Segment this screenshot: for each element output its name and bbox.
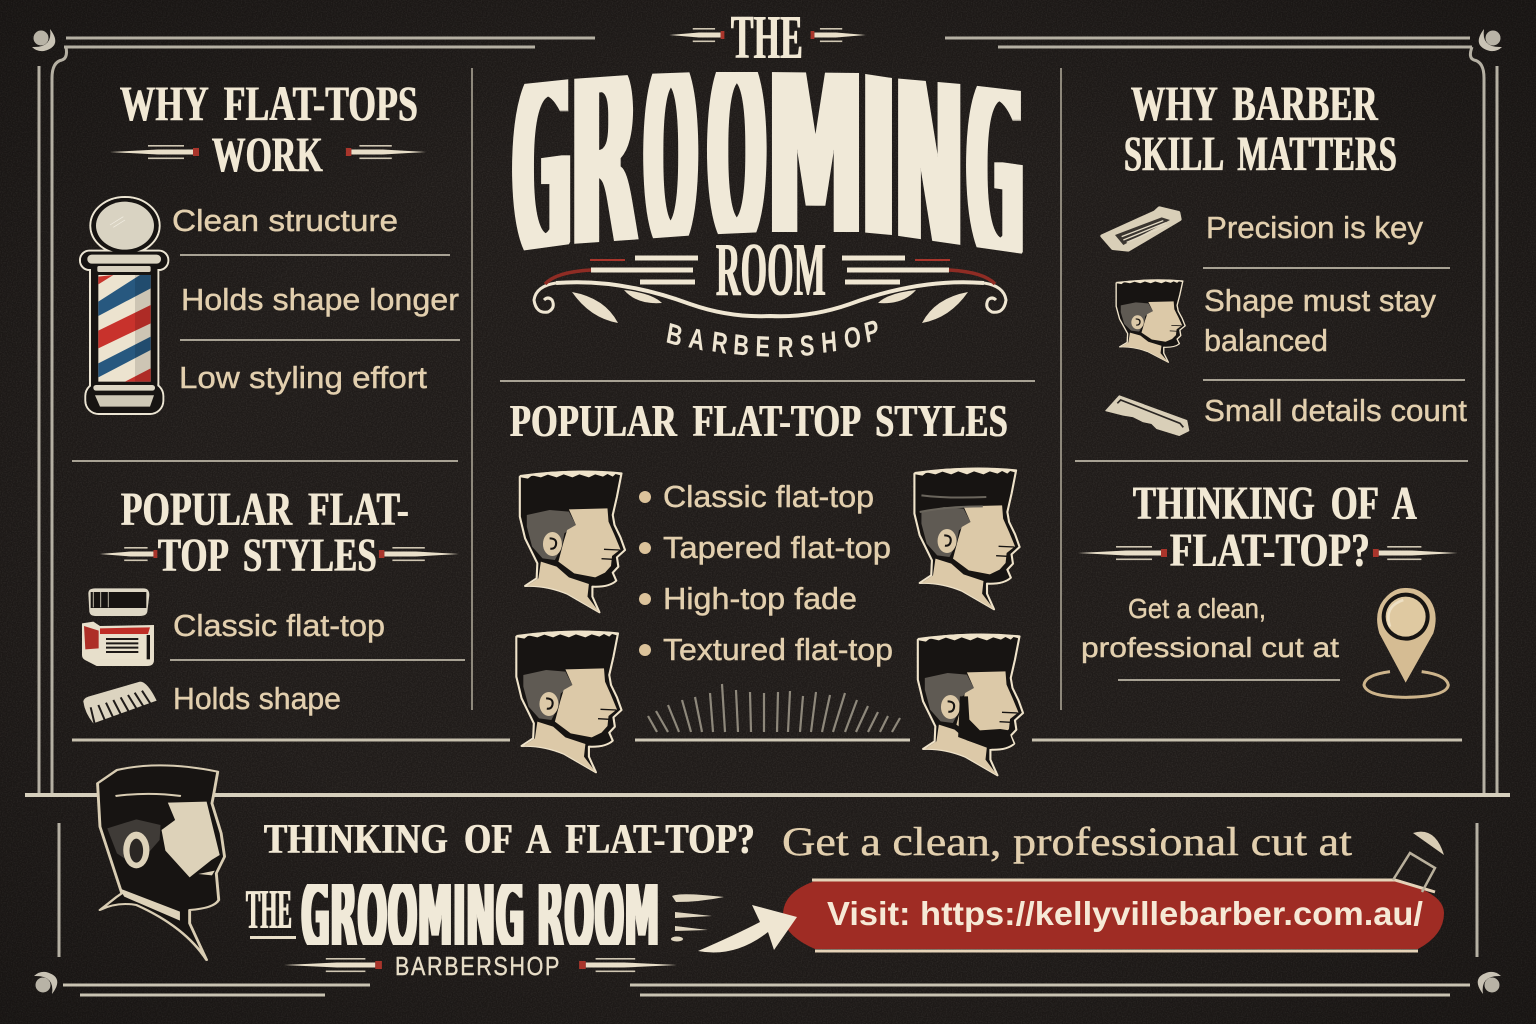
list: reasons: Low styling effort — [179, 360, 427, 395]
heading: THINKING OF A — [1133, 477, 1417, 530]
text block — [1081, 593, 1340, 680]
title word: THE: THE — [731, 4, 803, 72]
title word: GROOMING: N — [894, 8, 964, 329]
heading — [100, 483, 459, 582]
panel: thinking of a flat-top — [1078, 477, 1458, 697]
title ornaments beside THE — [669, 28, 866, 42]
list: reasons — [1203, 210, 1467, 428]
icon: location pin — [1364, 588, 1448, 697]
heading: WORK — [212, 126, 323, 182]
list: reasons: Small details count — [1204, 393, 1467, 428]
title word: GROOMING: R — [570, 3, 639, 323]
title word: GROOMING — [512, 72, 1023, 254]
title word: GROOMING: O — [708, 0, 766, 313]
list: styles: Holds shape — [173, 681, 341, 716]
main title logo — [512, 0, 1024, 364]
url button: Visit: https://kellyvillebarber.com.au/ — [827, 895, 1423, 932]
title flourish — [534, 258, 1006, 323]
list: reasons: balanced — [1204, 323, 1328, 358]
bottom banner — [98, 765, 1444, 981]
icon: razor tool — [1393, 832, 1444, 892]
logo subtitle: BARBERSHOP — [395, 951, 561, 981]
list: reasons: Clean structure — [172, 203, 398, 238]
illustration: bearded flat-top head — [918, 634, 1023, 775]
list: reasons: Precision is key — [1206, 210, 1423, 245]
title word: GROOMING: I — [860, 1, 897, 317]
bullet list: Tapered flat-top — [663, 530, 891, 565]
heading: FLAT-TOP? — [1170, 524, 1370, 577]
sunburst ornament — [635, 684, 910, 740]
main title logo: ROOM — [716, 228, 826, 312]
title word: GROOMING: G — [512, 9, 571, 332]
logo ornaments — [284, 894, 724, 972]
bullet list — [639, 479, 893, 667]
icon: pomade jar — [82, 588, 154, 666]
icon: clipper — [1102, 208, 1180, 250]
logo underline — [250, 936, 296, 939]
url button — [783, 880, 1444, 951]
heading: THINKING OF A FLAT-TOP? — [264, 817, 755, 863]
text block: Get a clean, — [1128, 593, 1266, 624]
heading: SKILL MATTERS — [1124, 125, 1397, 181]
logo: the grooming room barbershop: THE — [246, 879, 292, 941]
logo words: grooming room: GROOMING ROOM — [301, 860, 660, 972]
bullet list: High-top fade — [663, 581, 857, 616]
icon: razor comb — [1106, 396, 1189, 435]
list: styles — [170, 608, 465, 716]
heading: TOP STYLES — [158, 529, 377, 582]
bullet list: Classic flat-top — [663, 479, 874, 514]
panel: popular flat-top styles left — [82, 483, 465, 724]
panel: why barber skill matters — [1102, 75, 1467, 435]
panel: why flat-tops work — [80, 75, 460, 414]
title word: GROOMING: M — [767, 0, 864, 312]
illustration: classic flat-top head — [520, 471, 625, 612]
title word: GROOMING: O — [644, 1, 698, 319]
panel: popular flat-top styles centre — [510, 395, 1023, 775]
list: reasons: Holds shape longer — [181, 282, 459, 317]
heading: WHY FLAT-TOPS — [120, 75, 418, 131]
heading — [1078, 477, 1458, 577]
list: reasons: Shape must stay — [1204, 283, 1436, 318]
icon: barber pole — [80, 197, 168, 414]
panel dividers — [25, 68, 1510, 795]
title word: GROOMING: G — [966, 13, 1024, 336]
heading: WHY BARBER — [1131, 75, 1378, 131]
arrow — [698, 905, 797, 952]
heading — [110, 75, 426, 182]
heading — [1124, 75, 1397, 181]
title subtitle: BARBERSHOP: BARBERSHOP — [664, 314, 882, 364]
illustration: bearded man profile — [98, 765, 225, 960]
logo: the grooming room barbershop — [246, 884, 724, 976]
bullet list: Textured flat-top — [663, 632, 893, 667]
icon: flat-top head — [1116, 279, 1185, 362]
heading: POPULAR FLAT- — [121, 483, 409, 536]
text block: professional cut at — [1081, 632, 1339, 663]
heading: POPULAR FLAT-TOP STYLES — [510, 395, 1008, 446]
illustration: tapered flat-top head — [914, 468, 1020, 609]
icon: comb — [83, 682, 157, 724]
tagline: Get a clean, professional cut at — [782, 819, 1352, 864]
illustration: high-top fade head — [516, 631, 622, 772]
list: styles: Classic flat-top — [173, 608, 385, 643]
list: reasons — [172, 203, 460, 395]
